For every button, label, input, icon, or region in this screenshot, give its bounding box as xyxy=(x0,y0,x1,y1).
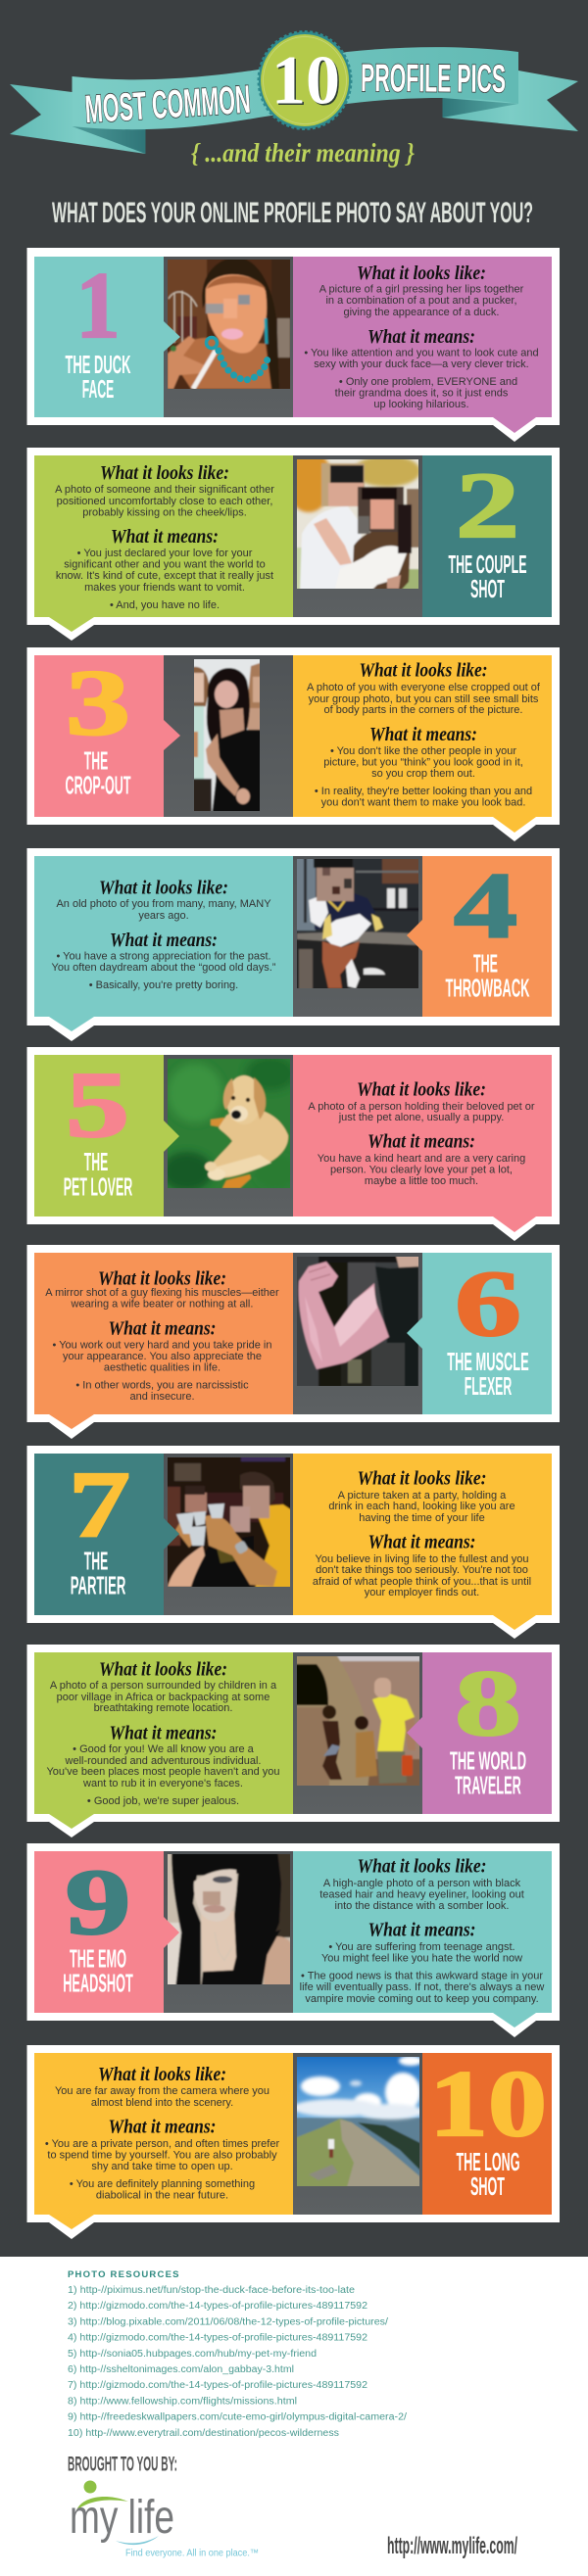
text block: means: You believe in living life to the fullest and you xyxy=(316,1553,528,1565)
heading: what it looks like: What it looks like: xyxy=(98,2064,226,2085)
panel: 3 crop-out: of body parts in the corners of the picture. xyxy=(323,704,523,716)
panel: 6 muscle flexer: aesthetic qualities in life. xyxy=(104,1361,220,1373)
ribbon main band xyxy=(73,47,518,129)
panel: 4 throwback: THE xyxy=(473,948,498,978)
heading: what it looks like: What it looks like: xyxy=(357,1079,486,1101)
panel: 7 partier: don't take things too seriously. You're not too xyxy=(316,1564,528,1576)
text block: looks: A photo of you with everyone else cropped out of xyxy=(307,682,541,693)
heading: what it looks like: What it looks like: xyxy=(357,262,486,284)
text block: means: • You like attention and you want to look cute and xyxy=(304,347,539,358)
heading: what it looks like: What it looks like: xyxy=(359,660,488,682)
text block: looks: An old photo of you from many, many, MANY xyxy=(56,898,271,910)
photo: cropped group xyxy=(194,659,260,811)
panel: 10 long shot: THE LONG xyxy=(457,2147,519,2176)
panel: 6 muscle flexer xyxy=(27,1245,560,1439)
panel: 3 crop-out: THE xyxy=(84,746,108,776)
panel: 3 crop-out: CROP-OUT xyxy=(65,770,131,799)
footer: photo resources: 7) http://gizmodo.com/the-14-types-of-profile-pictures-489117592 xyxy=(68,2380,368,2391)
heading: what it looks like: What it looks like: xyxy=(98,1267,226,1289)
panel: 10 long shot: almost blend into the scenery. xyxy=(91,2097,233,2109)
heading: what it means: What it means: xyxy=(110,1722,218,1743)
panel: 5 pet lover: person. You clearly love your pet a lot, xyxy=(330,1164,513,1175)
panel: 8 world traveler: TRAVELER xyxy=(455,1771,521,1800)
panel: 1 duck face: in a combination of a pout and a pucker, xyxy=(325,295,517,307)
text block: looks: You are far away from the camera where you xyxy=(55,2085,270,2097)
number: 10 xyxy=(429,2051,547,2156)
panel: 3 crop-out: • In reality, they're better looking than you and xyxy=(315,786,532,797)
panel: 9 emo headshot xyxy=(27,1843,560,2037)
arrow pointer xyxy=(407,1317,422,1349)
number 10 shadow: 10 xyxy=(272,44,341,120)
footer: photo resources: 3) http://blog.pixable.com/2011/06/08/the-12-types-of-profile-pictures/ xyxy=(68,2316,388,2327)
logo swoosh xyxy=(76,2497,128,2510)
logo tagline: Find everyone. All in one place.™ xyxy=(125,2549,259,2558)
panel: 3 crop-out xyxy=(27,647,560,841)
panel: 1 duck face: up looking hilarious. xyxy=(373,399,469,410)
footer: photo resources: 4) http://gizmodo.com/the-14-types-of-profile-pictures-489117592 xyxy=(68,2333,368,2344)
resources list: 1) http-//piximus.net/fun/stop-the-duck-face-before-its-too-late xyxy=(68,2285,355,2296)
number: 6 xyxy=(455,1251,521,1356)
banner text: most common: MOST COMMON xyxy=(83,78,252,131)
panel: 5 pet lover: maybe a little too much. xyxy=(365,1175,478,1187)
panel: 5 pet lover: just the pet alone, usually a puppy. xyxy=(338,1112,504,1123)
panel: 2 couple shot: positioned uncomfortably close to each other, xyxy=(57,496,272,507)
panel: 10 long shot: SHOT xyxy=(470,2171,505,2201)
panel: 6 muscle flexer: • In other words, you are narcissistic xyxy=(75,1379,249,1391)
arrow pointer xyxy=(164,1518,179,1550)
panel: 2 couple shot: significant other and you want the world to xyxy=(64,558,266,570)
title banner xyxy=(10,31,578,154)
text block: looks: A photo of a person surrounded by children in a xyxy=(50,1680,277,1692)
logo circle xyxy=(84,2480,96,2494)
panel: 4 throwback: • Basically, you're pretty boring. xyxy=(89,979,238,991)
heading: what it means: What it means: xyxy=(111,526,219,548)
number: 9 xyxy=(65,1849,131,1954)
badge green disc xyxy=(261,34,349,126)
panel: 9 emo headshot: • The good news is that this awkward stage in your xyxy=(301,1971,543,1982)
panel: 5 pet lover xyxy=(27,1047,560,1241)
panel: 1 duck face: their grandma does it, so it just ends xyxy=(335,388,509,400)
text block: looks: A high-angle photo of a person with black xyxy=(323,1878,521,1889)
panel: 10 long shot: to spend time by yourself. You are also probably xyxy=(47,2149,277,2161)
panel: 2 couple shot: makes your friends want to vomit. xyxy=(84,582,245,594)
arrow pointer xyxy=(407,1717,422,1748)
text block: looks: A mirror shot of a guy flexing his muscles—either xyxy=(45,1287,279,1299)
panel: 9 emo headshot: HEADSHOT xyxy=(63,1969,133,1998)
panel: 2 couple shot: know. It's kind of cute, except that it really just xyxy=(56,570,273,582)
text block: means: • You work out very hard and you take pride in xyxy=(53,1340,272,1352)
photo: cheerleader xyxy=(297,859,418,988)
panel: 1 duck face xyxy=(27,248,560,442)
ribbon left tail xyxy=(10,84,145,154)
panel: 7 partier: having the time of your life xyxy=(359,1512,485,1524)
panel: 9 emo headshot: vampire movie coming out to keep you company. xyxy=(305,1993,539,2005)
panel: 3 crop-out: you don't want them to make you look bad. xyxy=(321,797,525,809)
photo: puppy xyxy=(168,1059,290,1188)
panel: 9 emo headshot: life will eventually pass. If not, there's always a new xyxy=(300,1981,544,1993)
logo: mylife xyxy=(70,2480,259,2558)
footer: photo resources: 8) http://www.fellowship.com/flights/missions.html xyxy=(68,2396,297,2407)
panel: 5 pet lover: THE xyxy=(84,1147,108,1176)
panel: 5 pet lover: PET LOVER xyxy=(64,1171,132,1201)
footer: photo resources: 2) http://gizmodo.com/the-14-types-of-profile-pictures-489117592 xyxy=(68,2301,368,2312)
panel: 4 throwback xyxy=(27,848,560,1041)
logo wordmark: my life xyxy=(70,2492,174,2544)
footer: photo resources: 6) http-//ssheltonimages.com/alon_gabbay-3.html xyxy=(68,2364,294,2375)
heading: what it means: What it means: xyxy=(368,1130,475,1152)
arrow pointer xyxy=(164,720,180,750)
number: 5 xyxy=(66,1052,129,1157)
heading: what it means: What it means: xyxy=(369,724,477,745)
panel: 9 emo headshot: into the distance with a somber look. xyxy=(335,1900,509,1912)
heading: what it looks like: What it looks like: xyxy=(99,1659,227,1681)
panel: 10 long shot: • You are definitely planning something xyxy=(70,2178,255,2190)
footer: photo resources: 5) http-//sonia05.hubpages.com/hub/my-pet-my-friend xyxy=(68,2349,317,2360)
text block: means: • You are a private person, and often times prefer xyxy=(45,2138,279,2150)
panel: 8 world traveler: well-rounded and adventurous individual. xyxy=(65,1755,261,1767)
text: BROUGHT TO YOU BY: xyxy=(68,2453,177,2476)
heading: what it means: What it means: xyxy=(368,326,475,348)
panel: 10 long shot: shy and take time to open up. xyxy=(91,2161,233,2172)
panel: 7 partier: THE xyxy=(84,1546,108,1575)
panel: 8 world traveler: breathtaking remote location. xyxy=(94,1702,232,1714)
number: 8 xyxy=(455,1650,521,1755)
ribbon left fold xyxy=(73,126,145,154)
heading: what it looks like: What it looks like: xyxy=(100,462,229,484)
arrow pointer xyxy=(164,1917,179,1948)
photo: mountain xyxy=(297,2057,419,2186)
heading: what it means: What it means: xyxy=(368,1532,476,1553)
footer: photo resources xyxy=(68,2269,407,2439)
panel: 2 couple shot: SHOT xyxy=(470,574,505,603)
panel: 2 couple shot xyxy=(27,448,560,641)
panel: 1 duck face: FACE xyxy=(82,374,114,404)
panel: 2 couple shot: • And, you have no life. xyxy=(110,599,220,611)
panel: 3 crop-out: so you crop them out. xyxy=(371,768,475,780)
card frame xyxy=(27,248,560,442)
photo: village xyxy=(297,1656,419,1786)
text block: looks: A photo of a person holding their beloved pet or xyxy=(308,1101,535,1113)
text block: looks: A photo of someone and their significant other xyxy=(55,484,274,496)
panel: 6 muscle flexer: your appearance. You also appreciate the xyxy=(63,1351,262,1362)
heading: what it means: What it means: xyxy=(110,930,218,951)
photo: duck face girl xyxy=(168,260,290,389)
heading: what it means: What it means: xyxy=(108,1318,216,1340)
number: 7 xyxy=(69,1452,130,1556)
arrow pointer xyxy=(164,321,180,352)
arrow pointer xyxy=(407,920,422,951)
text block: means: • You are suffering from teenage angst. xyxy=(328,1941,515,1953)
text block: means: You have a kind heart and are a very caring xyxy=(318,1153,525,1165)
number: 4 xyxy=(454,852,517,958)
panel: 2 couple shot: probably kissing on the cheek/lips. xyxy=(82,507,247,519)
heading: what it looks like: What it looks like: xyxy=(357,1855,486,1877)
number: 3 xyxy=(66,650,130,754)
panel: 4 throwback: years ago. xyxy=(138,910,189,922)
panel: 7 partier xyxy=(27,1446,560,1639)
panel: 8 world traveler: You've been places most people haven't and you xyxy=(46,1766,280,1778)
footer: photo resources: 9) http-//freedeskwallpapers.com/cute-emo-girl/olympus-digital-camera-2/ xyxy=(68,2412,407,2423)
heading: what it looks like: What it looks like: xyxy=(99,878,228,899)
arrow pointer xyxy=(164,1121,179,1152)
number: 1 xyxy=(76,253,120,358)
number: 2 xyxy=(456,453,519,557)
panel: 1 duck face: sexy with your duck face—a very clever trick. xyxy=(314,358,529,370)
panel: 6 muscle flexer: and insecure. xyxy=(129,1391,195,1403)
panel: 4 throwback: You often daydream about the “good old days.” xyxy=(52,962,276,974)
panel: 8 world traveler: want to rub it in everyone's faces. xyxy=(82,1778,243,1789)
panel: 7 partier: PARTIER xyxy=(71,1571,125,1600)
photo: flexing arm xyxy=(297,1257,418,1386)
panel: 9 emo headshot: THE EMO xyxy=(70,1943,126,1973)
text block: means: • You have a strong appreciation for the past. xyxy=(56,950,271,962)
photo: couple xyxy=(297,459,418,589)
panel: 3 crop-out: picture, but you “think” you look good in it, xyxy=(323,756,523,768)
panel: 7 partier: your employer finds out. xyxy=(365,1587,479,1598)
panel: 1 duck face: THE DUCK xyxy=(65,350,131,379)
ribbon right tail xyxy=(443,71,578,131)
subtitle: { ...and their meaning } xyxy=(191,138,416,167)
panel: 1 duck face: giving the appearance of a duck. xyxy=(343,307,500,318)
panel: 1 duck face: • Only one problem, EVERYONE and xyxy=(339,376,517,388)
necklace xyxy=(219,351,269,380)
photo: emo girl xyxy=(168,1854,290,1984)
footer: photo resources: 10) http-//www.everytrail.com/destination/pecos-wilderness xyxy=(68,2428,339,2439)
photo: party xyxy=(168,1457,290,1587)
badge inner ring xyxy=(263,37,347,123)
panel: 6 muscle flexer: FLEXER xyxy=(465,1371,512,1401)
panel: 10 long shot xyxy=(27,2045,560,2239)
heading: what it looks like: What it looks like: xyxy=(357,1467,486,1489)
text block: looks: A picture taken at a party, holding a xyxy=(338,1490,507,1502)
panel: 7 partier: afraid of what people think of you...that is until xyxy=(313,1576,531,1588)
heading: what it means: What it means: xyxy=(108,2116,216,2137)
panel: 9 emo headshot: You might feel like you hate the world now xyxy=(321,1953,522,1965)
panel: 8 world traveler: • Good job, we're super jealous. xyxy=(87,1795,239,1807)
panel: 3 crop-out: your group photo, but you can still see small bits xyxy=(309,693,539,705)
panel: 9 emo headshot: teased hair and heavy eyeliner, looking out xyxy=(319,1888,524,1900)
panel: 8 world traveler xyxy=(27,1645,560,1837)
text block: looks: A picture of a girl pressing her lips together xyxy=(319,284,524,296)
panel: 8 world traveler: poor village in Africa or backpacking at some xyxy=(57,1692,270,1703)
text block: means: • Good for you! We all know you are a xyxy=(73,1743,255,1755)
panel: 7 partier: drink in each hand, looking like you are xyxy=(328,1501,515,1512)
panel: 6 muscle flexer: wearing a wife beater or nothing at all. xyxy=(71,1299,253,1311)
panel: 10 long shot: diabolical in the near future. xyxy=(96,2190,228,2202)
text block: means: • You just declared your love for your xyxy=(77,548,253,559)
logo blue swoosh xyxy=(116,2536,159,2545)
heading: what it means: What it means: xyxy=(368,1920,476,1941)
text panel xyxy=(293,257,552,433)
text block: means: • You don't like the other people in your xyxy=(330,745,516,757)
resources heading: PHOTO RESOURCES xyxy=(68,2269,178,2280)
number 10: 10 xyxy=(271,43,340,119)
ribbon right fold xyxy=(443,98,518,118)
badge scalloped edge xyxy=(259,31,351,129)
